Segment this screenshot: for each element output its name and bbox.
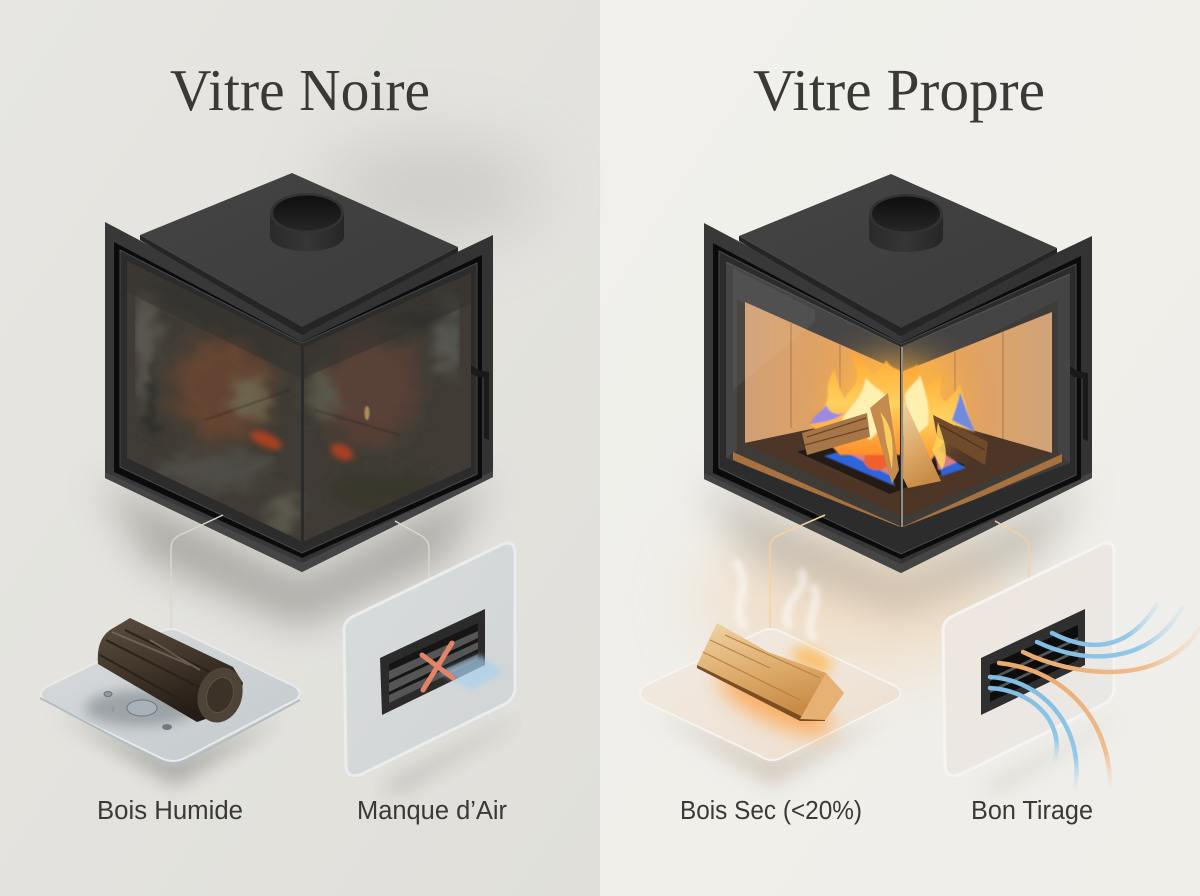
title: Vitre Noire: Vitre Noire — [170, 57, 430, 123]
warm glow on right background — [700, 530, 1020, 670]
blue air leak — [440, 655, 505, 690]
burning logs — [802, 413, 870, 455]
panel: dirty glass stove — [100, 173, 493, 625]
ash tray — [797, 436, 965, 494]
water drops — [104, 692, 172, 730]
connector: dry wood — [770, 515, 825, 628]
steam — [735, 560, 816, 640]
connector: good draught — [995, 521, 1029, 582]
title: Vitre Propre: Vitre Propre — [753, 57, 1045, 123]
vent panel: blocked air — [344, 543, 520, 790]
vent grille — [981, 609, 1085, 715]
coals — [824, 450, 966, 487]
log — [697, 623, 844, 720]
vent grille — [380, 609, 485, 715]
panel: clean glass stove — [699, 174, 1092, 610]
dirty soot glass — [120, 255, 480, 550]
red cross — [422, 643, 453, 690]
panel: background right — [600, 0, 1200, 896]
airflow curves — [990, 605, 1200, 788]
label: Manque d'Air: Manque d’Air — [357, 797, 508, 825]
glass reflection — [733, 268, 815, 390]
connector: wet wood — [171, 515, 223, 628]
label: Bon Tirage: Bon Tirage — [971, 797, 1093, 825]
label: Bois Sec: Bois Sec (<20%) — [680, 797, 862, 825]
firebox interior — [720, 255, 1075, 535]
label: Bois Humide: Bois Humide — [97, 797, 243, 825]
log — [98, 618, 243, 722]
plate with wet log — [40, 618, 300, 785]
panel: background left — [0, 0, 600, 896]
vent panel: good draught — [943, 543, 1200, 790]
connector: lack of air — [395, 521, 429, 582]
plate with dry log — [640, 560, 900, 785]
smoke haze behind left stove — [320, 140, 540, 240]
warm glow — [710, 659, 840, 747]
flames — [810, 352, 975, 470]
